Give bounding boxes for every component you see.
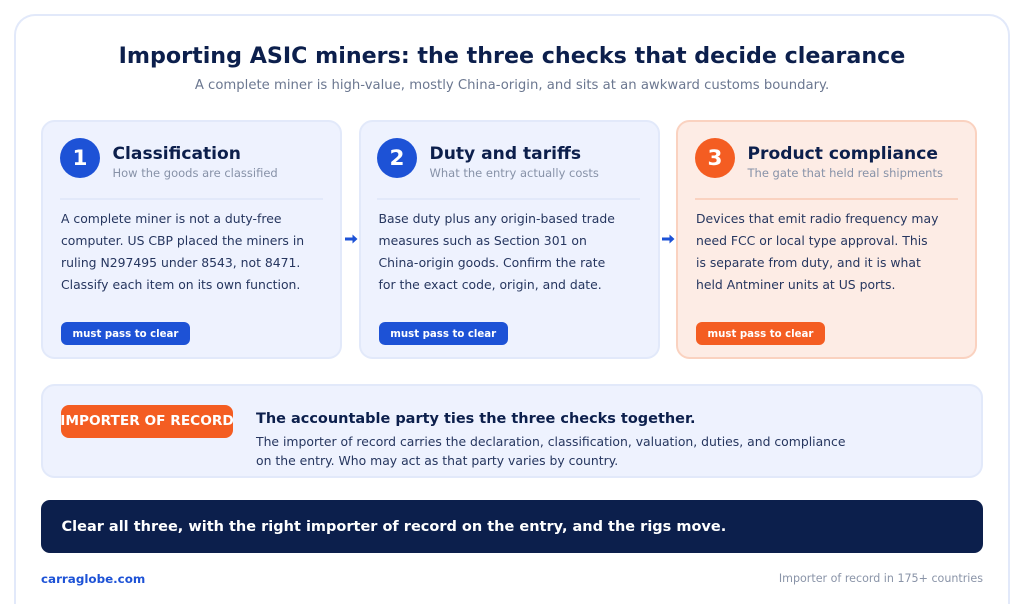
body: importer of record: on the entry. Who may act as that party varies by country. [256, 452, 618, 468]
subheading: compliance: The gate that held real shipments [748, 166, 943, 180]
body: compliance: Devices that emit radio frequency may [696, 211, 938, 226]
step number 2: 2 [390, 146, 404, 171]
body: compliance: need FCC or local type approval. This [696, 233, 928, 248]
step number 1: 1 [73, 146, 87, 171]
body: compliance: is separate from duty, and it is what [696, 255, 921, 270]
body: duty: Base duty plus any origin-based trade [378, 211, 615, 226]
badge: importer of record [61, 404, 233, 438]
subheading: duty: What the entry actually costs [430, 166, 599, 180]
heading: accountable party: The accountable party ties the three checks together. [256, 411, 696, 427]
tag: must pass: must pass to clear [708, 329, 813, 340]
panel: duty and tariffs [358, 120, 660, 358]
tag: must pass [696, 322, 825, 345]
body: classification: A complete miner is not a duty-free [61, 211, 281, 226]
body: importer of record [256, 434, 845, 468]
panel: importer of record [41, 384, 983, 478]
body: classification: ruling N297495 under 8543, not 8471. [61, 255, 300, 270]
arrow: duty to compliance [662, 234, 674, 244]
tag: must pass: must pass to clear [73, 329, 178, 340]
step number 1 [60, 138, 100, 178]
body: importer of record: The importer of record carries the declaration, classification, valuation, duties, and compliance [256, 434, 845, 448]
heading: duty: Duty and tariffs [430, 144, 581, 164]
body: duty: measures such as Section 301 on [378, 233, 587, 248]
body: classification [61, 211, 304, 292]
step number 2 [377, 138, 417, 178]
banner: conclusion [41, 500, 983, 553]
tag: must pass: must pass to clear [390, 329, 496, 340]
footer: brand: carraglobe.com [41, 572, 145, 586]
subheading: classification: How the goods are classified [112, 166, 278, 180]
body: duty: China-origin goods. Confirm the rate [378, 255, 605, 270]
body: duty [378, 211, 615, 292]
heading: classification: Classification [112, 144, 241, 164]
panel: product compliance [676, 120, 977, 358]
footer: note: Importer of record in 175+ countries [779, 572, 983, 585]
tag: must pass [379, 322, 508, 345]
body: classification: Classify each item on its own function. [61, 277, 300, 292]
panel: classification [41, 120, 342, 358]
title: Importing ASIC miners: the three checks that decide clearance [119, 43, 905, 69]
step number 3 [695, 138, 735, 178]
body: compliance: held Antminer units at US ports. [696, 277, 895, 292]
badge: importer of record: IMPORTER OF RECORD [60, 412, 234, 428]
body: compliance [696, 211, 938, 292]
banner: conclusion: Clear all three, with the right importer of record on the entry, and the rigs move. [62, 519, 726, 535]
arrow: classification to duty [345, 234, 358, 244]
tag: must pass [61, 322, 190, 345]
step number 3: 3 [708, 146, 722, 171]
heading: compliance: Product compliance [748, 144, 938, 164]
subtitle: A complete miner is high-value, mostly China-origin, and sits at an awkward customs boundary. [195, 78, 829, 93]
body: duty: for the exact code, origin, and date. [378, 277, 602, 292]
body: classification: computer. US CBP placed the miners in [61, 233, 304, 248]
